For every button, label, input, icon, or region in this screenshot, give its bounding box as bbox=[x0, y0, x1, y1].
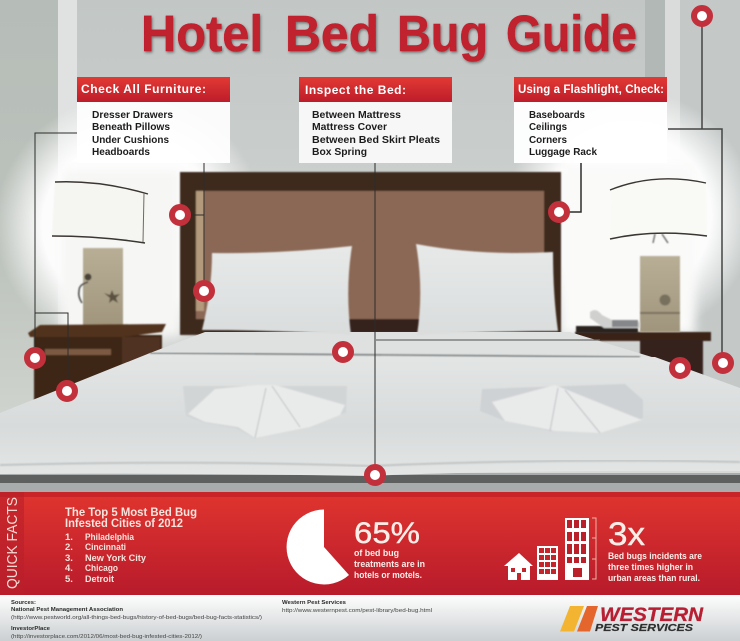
panel: check all furniture bbox=[77, 77, 230, 163]
top 5 cities list: 3. bbox=[65, 553, 73, 564]
stat: 65%: of bed bug bbox=[354, 548, 399, 559]
top 5 cities list: Detroit bbox=[85, 574, 115, 585]
list: flashlight bbox=[529, 109, 597, 158]
logo stripes bbox=[560, 606, 598, 632]
left pillow bbox=[202, 246, 352, 335]
heading: inspect the bed: Inspect the Bed: bbox=[305, 83, 406, 97]
right lamp shade bbox=[610, 179, 707, 239]
marker: left nightstand lower bbox=[59, 383, 75, 399]
list: furniture: Headboards bbox=[92, 146, 150, 158]
top 5 cities list: New York City bbox=[85, 553, 147, 564]
icon: high-rise building bbox=[565, 518, 589, 580]
panel: quick facts band bbox=[0, 492, 740, 595]
left nightstand bbox=[28, 324, 166, 404]
marker: right nightstand bbox=[672, 360, 688, 376]
top 5 cities list: 1. bbox=[65, 532, 73, 543]
sources: right column: http://www.westernpest.com/pest-library/bed-bug.html bbox=[282, 608, 432, 614]
stat: 3x: three times higher in bbox=[608, 562, 693, 573]
panel: inspect the bed bbox=[299, 77, 452, 163]
left folded towel bbox=[183, 385, 347, 438]
list: furniture bbox=[92, 109, 173, 158]
right pillow bbox=[416, 244, 558, 335]
right nightstand, lamp and phone bbox=[575, 179, 711, 385]
quick facts side label: QUICK FACTS bbox=[5, 497, 21, 589]
stat: 65% bbox=[354, 517, 425, 581]
marker: box spring bbox=[367, 467, 383, 483]
heading: using a flashlight bbox=[514, 77, 667, 102]
marker: mattress seam bbox=[335, 344, 351, 360]
stat: 3x bbox=[608, 516, 702, 584]
top 5 cities list: Cincinnati bbox=[85, 542, 126, 553]
sources: left column bbox=[11, 600, 262, 640]
connector lines bbox=[35, 22, 722, 470]
sources: left column: InvestorPlace bbox=[11, 626, 50, 632]
left lamp shade bbox=[52, 182, 148, 243]
left lamp base bbox=[79, 248, 123, 328]
marker: baseboard bbox=[715, 355, 731, 371]
top 5 cities list: 5. bbox=[65, 574, 73, 585]
sources: right column bbox=[282, 600, 432, 614]
top 5 cities list: 2. bbox=[65, 542, 73, 553]
list: flashlight: Ceilings bbox=[529, 121, 567, 133]
marker: ceiling bbox=[694, 8, 710, 24]
sources: left column: Sources: bbox=[11, 600, 36, 606]
icon: house bbox=[504, 553, 533, 580]
icon: mid-rise building bbox=[537, 546, 558, 580]
list: furniture: Under Cushions bbox=[92, 134, 169, 146]
list: bed: Box Spring bbox=[312, 146, 367, 158]
folded duvet band bbox=[150, 332, 655, 358]
title: Bed bbox=[285, 5, 379, 62]
footer background bbox=[0, 595, 740, 641]
list: furniture: Beneath Pillows bbox=[92, 121, 170, 133]
list: bed: Between Bed Skirt Pleats bbox=[312, 134, 440, 146]
marker: headboard lower bbox=[196, 283, 212, 299]
heading: inspect the bed bbox=[299, 77, 452, 102]
marker: left nightstand bbox=[27, 350, 43, 366]
logo: Western Pest Services bbox=[560, 605, 704, 634]
title: Guide bbox=[506, 5, 637, 62]
heading: check all furniture: Check All Furniture: bbox=[81, 82, 206, 96]
stat: 65%: hotels or motels. bbox=[354, 570, 422, 581]
list: bed: Between Mattress bbox=[312, 109, 401, 121]
sources: left column: (http://investorplace.com/2012/06/most-bed-bug-infested-cities-2012/) bbox=[11, 634, 202, 640]
sources: left column: National Pest Management Association bbox=[11, 607, 124, 613]
list: flashlight: Baseboards bbox=[529, 109, 585, 121]
icon: height brackets bbox=[592, 518, 596, 579]
top 5 cities list: 4. bbox=[65, 563, 73, 574]
right lamp base bbox=[640, 234, 680, 332]
stat: 65%: treatments are in bbox=[354, 559, 425, 570]
list: bed: Mattress Cover bbox=[312, 121, 387, 133]
top 5 cities list: Chicago bbox=[85, 563, 118, 574]
photo background: room wall bbox=[0, 0, 740, 495]
logo wordmark bbox=[595, 605, 704, 634]
list: furniture: Dresser Drawers bbox=[92, 109, 173, 121]
bed bbox=[0, 332, 740, 492]
title: Bug bbox=[397, 5, 488, 62]
left nightstand and lamp bbox=[28, 182, 166, 404]
logo wordmark: PEST SERVICES bbox=[595, 622, 693, 634]
right folded towel bbox=[480, 384, 643, 433]
headboard bbox=[180, 172, 561, 335]
stat: 65%: 65% bbox=[354, 517, 420, 550]
right nightstand bbox=[575, 332, 711, 385]
top 5 cities list: The Top 5 Most Bed Bug bbox=[65, 507, 197, 519]
logo wordmark: WESTERN bbox=[600, 605, 704, 626]
list: flashlight: Luggage Rack bbox=[529, 146, 597, 158]
pie chart: 65% bbox=[287, 510, 349, 584]
list: flashlight: Corners bbox=[529, 134, 567, 146]
bed base shadow bbox=[0, 473, 740, 492]
panel: using a flashlight bbox=[514, 77, 667, 163]
title: Hotel bbox=[141, 5, 263, 62]
stat: 3x: 3x bbox=[608, 516, 645, 552]
top 5 cities list: Infested Cities of 2012 bbox=[65, 518, 183, 530]
heading: check all furniture bbox=[77, 77, 230, 102]
sources: left column: (http://www.pestworld.org/all-things-bed-bugs/history-of-bed-bugs/bed-bug-facts-statistics/) bbox=[11, 615, 262, 621]
title bbox=[141, 5, 637, 62]
stat: 3x: urban areas than rural. bbox=[608, 573, 700, 584]
top 5 cities list bbox=[65, 507, 197, 585]
marker: headboard right bbox=[551, 204, 567, 220]
top 5 cities list: Philadelphia bbox=[85, 532, 135, 543]
telephone bbox=[576, 310, 640, 333]
sources: right column: Western Pest Services bbox=[282, 600, 346, 606]
stat: 3x: Bed bugs incidents are bbox=[608, 551, 702, 562]
main bed sheet bbox=[0, 353, 740, 476]
heading: using a flashlight: Using a Flashlight, Check: bbox=[518, 84, 664, 96]
marker: headboard upper bbox=[172, 207, 188, 223]
list: bed bbox=[312, 109, 440, 158]
